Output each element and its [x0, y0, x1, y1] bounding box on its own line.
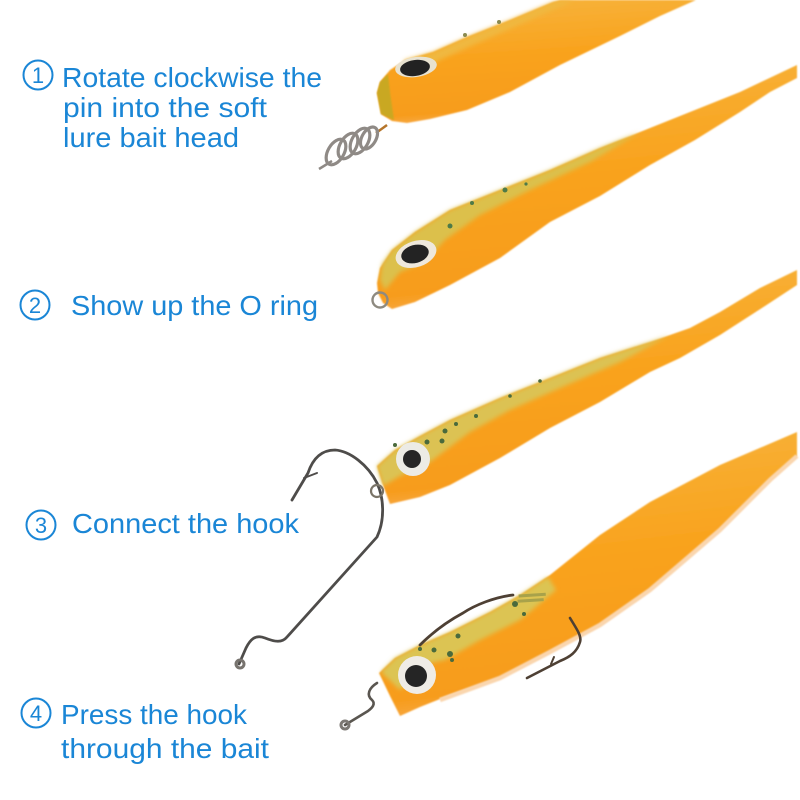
step 2 text: Show up the O ring: [71, 290, 318, 321]
lure 2: bait with O ring: [372, 65, 797, 309]
step 4 text: Press the hook: [61, 699, 248, 730]
step 3 text: 3: [35, 513, 47, 538]
icon: hook through bait: [341, 595, 580, 729]
icon: O ring: [372, 292, 388, 308]
step 2 text: 2: [29, 293, 41, 318]
step 1 text: lure bait head: [63, 122, 239, 153]
icon: spiral screw pin: [319, 124, 387, 169]
step 1 text: Rotate clockwise the: [62, 62, 322, 93]
step 1 text: 1: [32, 63, 44, 88]
lure 3: bait with hook attached: [377, 270, 797, 504]
lure 4: bait with hook pressed through: [341, 432, 797, 729]
step 1 text: pin into the soft: [63, 92, 267, 123]
lure 1: cut soft bait head: [377, 0, 696, 123]
step 1 text: [24, 60, 322, 153]
step 4 text: 4: [30, 701, 42, 726]
step 4 text: [22, 698, 269, 764]
icon: hook: [236, 450, 383, 668]
step 4 text: through the bait: [61, 733, 269, 764]
step 3 text: Connect the hook: [72, 508, 300, 539]
